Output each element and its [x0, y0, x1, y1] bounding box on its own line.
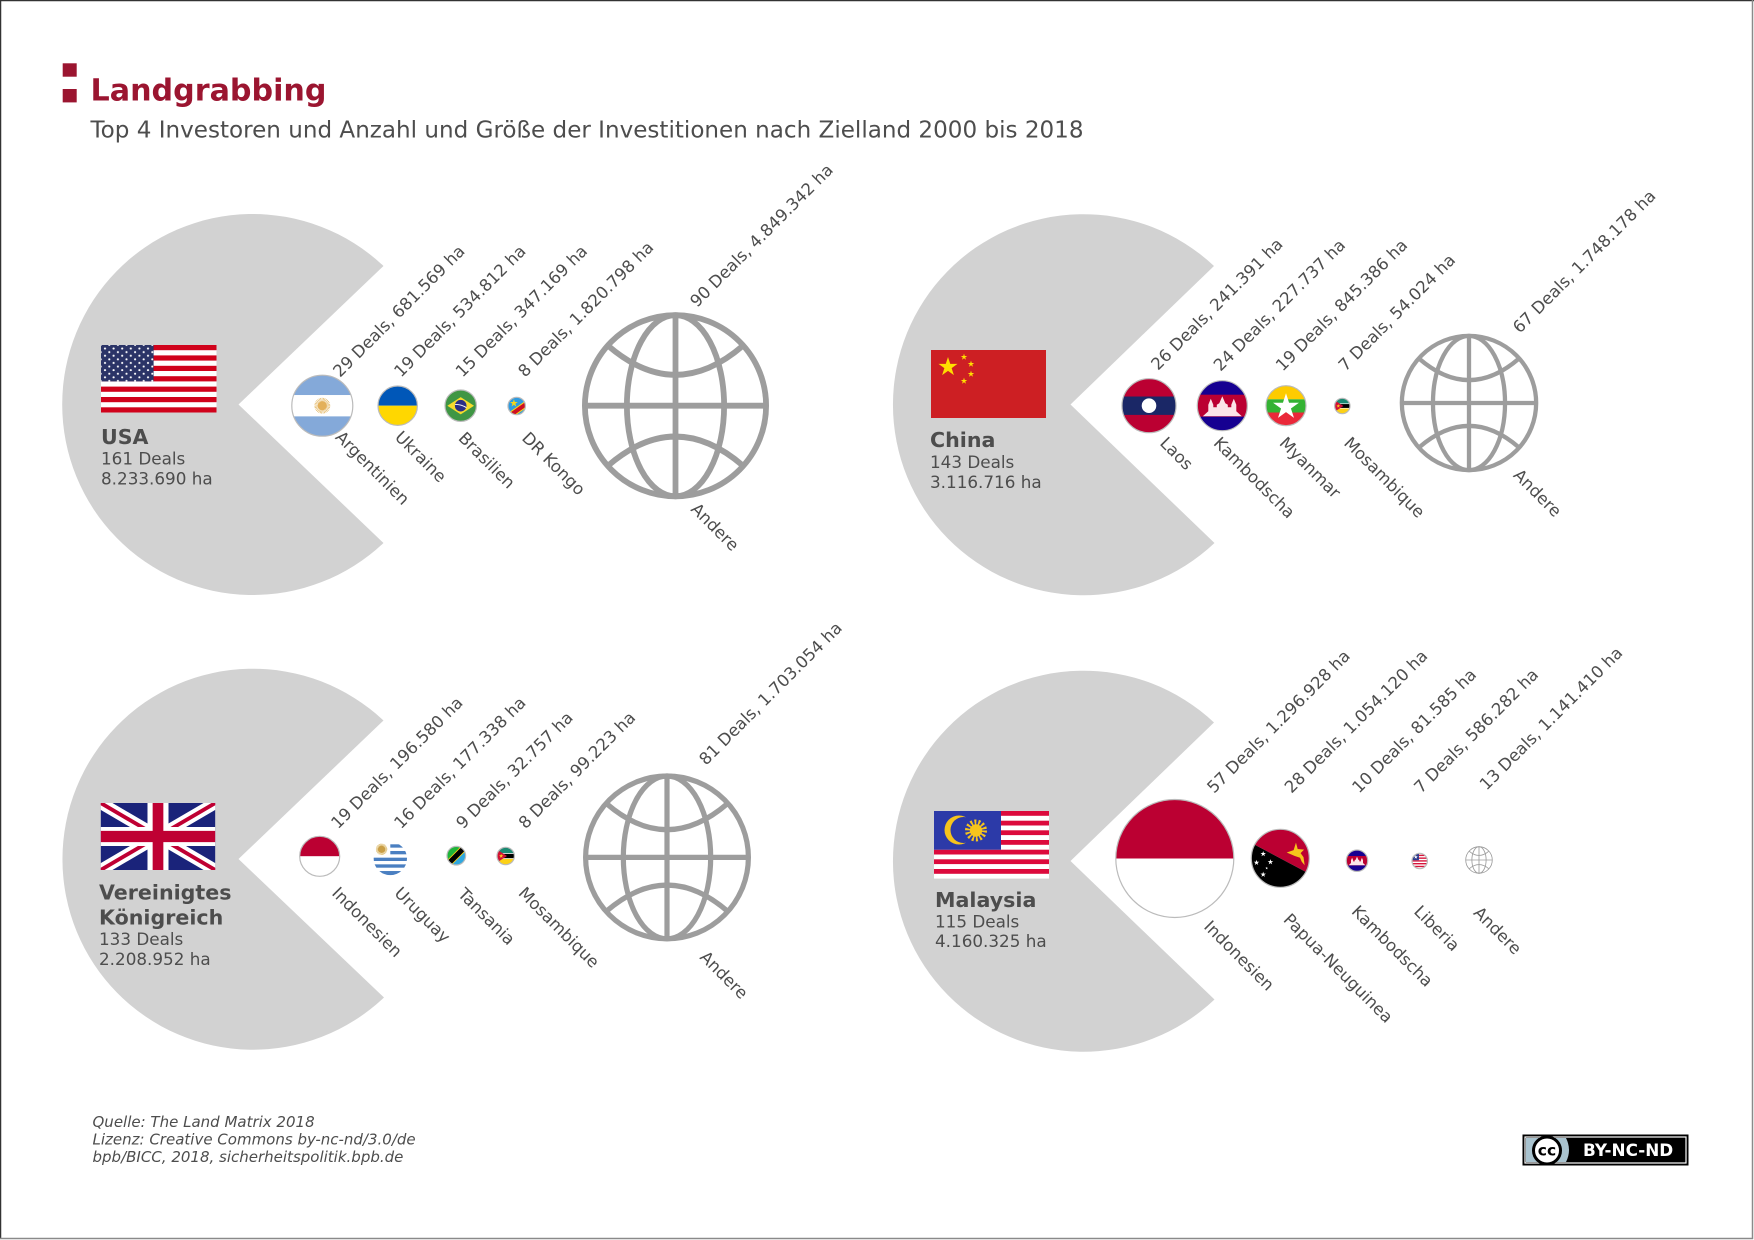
target: Mosambique [1335, 250, 1459, 522]
target: Mosambique: 8 Deals, 99.223 ha [515, 708, 639, 832]
license badge: CC BY-NC-ND: cc [1538, 1142, 1556, 1160]
flag: Vereinigtes Königreich [100, 803, 216, 870]
panel: China [893, 186, 1660, 595]
panel: Malaysia [893, 643, 1626, 1052]
target: Myanmar: Myanmar [1276, 433, 1344, 502]
investor summary: USA: 161 Deals [101, 448, 185, 468]
investor summary: China [930, 428, 1042, 492]
subtitle: Top 4 Investoren und Anzahl und Größe der Investitionen nach Zielland 2000 bis 2018 [89, 118, 1083, 144]
source note [92, 1113, 416, 1166]
target: Kambodscha: 24 Deals, 227.737 ha [1210, 236, 1349, 375]
investor summary: Vereinigtes Königreich: Vereinigtes [99, 881, 232, 905]
target: Laos [1122, 235, 1287, 474]
target: Mosambique: 7 Deals, 54.024 ha [1335, 250, 1459, 375]
target: Indonesien: 57 Deals, 1.296.928 ha [1203, 646, 1354, 797]
target: Andere [1466, 643, 1626, 958]
target: Brasilien: Brasilien [455, 428, 519, 492]
target: Argentinien: 29 Deals, 681.569 ha [329, 242, 469, 381]
investor summary: Vereinigtes Königreich: 133 Deals [99, 929, 183, 949]
target: Andere: 67 Deals, 1.748.178 ha [1509, 186, 1660, 337]
target: Indonesien [1116, 646, 1354, 995]
panel: Vereinigtes Königreich [62, 618, 846, 1050]
flag: China [931, 350, 1046, 418]
investor summary: China: 3.116.716 ha [930, 472, 1042, 492]
investor summary: USA: 8.233.690 ha [101, 468, 213, 488]
target: Brasilien [445, 242, 591, 492]
target: Myanmar: 19 Deals, 845.386 ha [1272, 236, 1411, 375]
investor summary: Malaysia: 115 Deals [935, 911, 1019, 931]
target: Laos: 26 Deals, 241.391 ha [1147, 235, 1287, 374]
source note: bpb/BICC, 2018, sicherheitspolitik.bpb.de [92, 1148, 403, 1166]
target: Tansania: 9 Deals, 32.757 ha [452, 708, 577, 832]
target: Uruguay: 16 Deals, 177.338 ha [390, 693, 530, 832]
target: Kambodscha [1197, 236, 1349, 522]
target: DR Kongo: 8 Deals, 1.820.798 ha [514, 238, 657, 381]
target: Andere: Andere [687, 499, 743, 555]
pacman shape [893, 671, 1214, 1052]
target: Indonesien: Indonesien [328, 883, 406, 961]
target: Kambodscha: Kambodscha [1348, 902, 1437, 991]
source note: Lizenz: Creative Commons by-nc-nd/3.0/de [92, 1130, 416, 1148]
investor summary: Malaysia: Malaysia [935, 888, 1036, 912]
flag: Malaysia [934, 811, 1049, 879]
investor summary: Vereinigtes Königreich: 2.208.952 ha [99, 949, 211, 969]
target: Tansania: Tansania [453, 884, 519, 949]
target: Andere: 81 Deals, 1.703.054 ha [695, 618, 846, 769]
flag: USA [101, 345, 216, 412]
target: Brasilien: 15 Deals, 347.169 ha [452, 242, 591, 381]
target: Myanmar [1266, 236, 1411, 502]
target: Indonesien: Indonesien [1200, 917, 1278, 995]
target: Mosambique: Mosambique [515, 883, 603, 972]
target: Kambodscha: Kambodscha [1210, 433, 1299, 522]
pacman shape [62, 669, 384, 1050]
target: Tansania [437, 708, 577, 949]
target: DR Kongo [506, 238, 657, 499]
target: Uruguay: Uruguay [391, 883, 454, 947]
target: Papua-Neuguinea: 28 Deals, 1.054.120 ha [1281, 646, 1431, 797]
source note: Quelle: The Land Matrix 2018 [92, 1113, 315, 1131]
target: Andere: Andere [696, 947, 752, 1003]
target: Andere: 13 Deals, 1.141.410 ha [1476, 643, 1626, 794]
target: Indonesien: 19 Deals, 196.580 ha [327, 693, 467, 832]
investor summary: Vereinigtes Königreich: Königreich [99, 906, 223, 930]
target: Liberia: Liberia [1410, 902, 1463, 955]
target: Kambodscha: 10 Deals, 81.585 ha [1348, 665, 1480, 797]
investor summary: China: China [930, 428, 995, 452]
investor summary: USA [101, 425, 213, 488]
target: Andere [585, 160, 837, 555]
target: Papua-Neuguinea: Papua-Neuguinea [1280, 910, 1397, 1027]
investor summary: USA: USA [101, 425, 149, 449]
license badge: CC BY-NC-ND: BY-NC-ND [1583, 1140, 1673, 1160]
target: Liberia [1410, 665, 1542, 955]
target: Kambodscha [1346, 665, 1480, 991]
target: Indonesien [300, 693, 467, 961]
target: Andere [586, 618, 846, 1003]
target: Andere: Andere [1510, 465, 1565, 521]
target: Argentinien: Argentinien [332, 427, 413, 509]
license badge: CC BY-NC-ND [1522, 1134, 1688, 1166]
investor summary: Vereinigtes Königreich [99, 881, 232, 969]
target: Andere [1402, 186, 1660, 521]
target: Mosambique [497, 708, 639, 972]
target: Liberia: 7 Deals, 586.282 ha [1410, 665, 1542, 797]
target: Uruguay [374, 693, 530, 947]
target: Mosambique: Mosambique [1340, 433, 1428, 522]
title: Landgrabbing [90, 73, 326, 108]
pacman shape [62, 214, 383, 595]
investor summary: Malaysia: 4.160.325 ha [935, 931, 1047, 951]
panel: USA [62, 160, 837, 595]
investor summary: China: 143 Deals [930, 452, 1014, 472]
target: Papua-Neuguinea [1221, 646, 1431, 1027]
investor summary: Malaysia [935, 888, 1047, 951]
target: Andere: Andere [1470, 903, 1525, 958]
target: Ukraine: 19 Deals, 534.812 ha [390, 242, 530, 381]
target: Laos: Laos [1156, 433, 1197, 474]
target: Argentinien [292, 242, 469, 509]
target: DR Kongo: DR Kongo [518, 428, 589, 499]
target: Andere: 90 Deals, 4.849.342 ha [686, 160, 837, 311]
pacman shape [893, 214, 1214, 595]
title marker squares [63, 63, 77, 102]
target: Ukraine: Ukraine [391, 427, 450, 486]
target: Ukraine [378, 242, 530, 486]
